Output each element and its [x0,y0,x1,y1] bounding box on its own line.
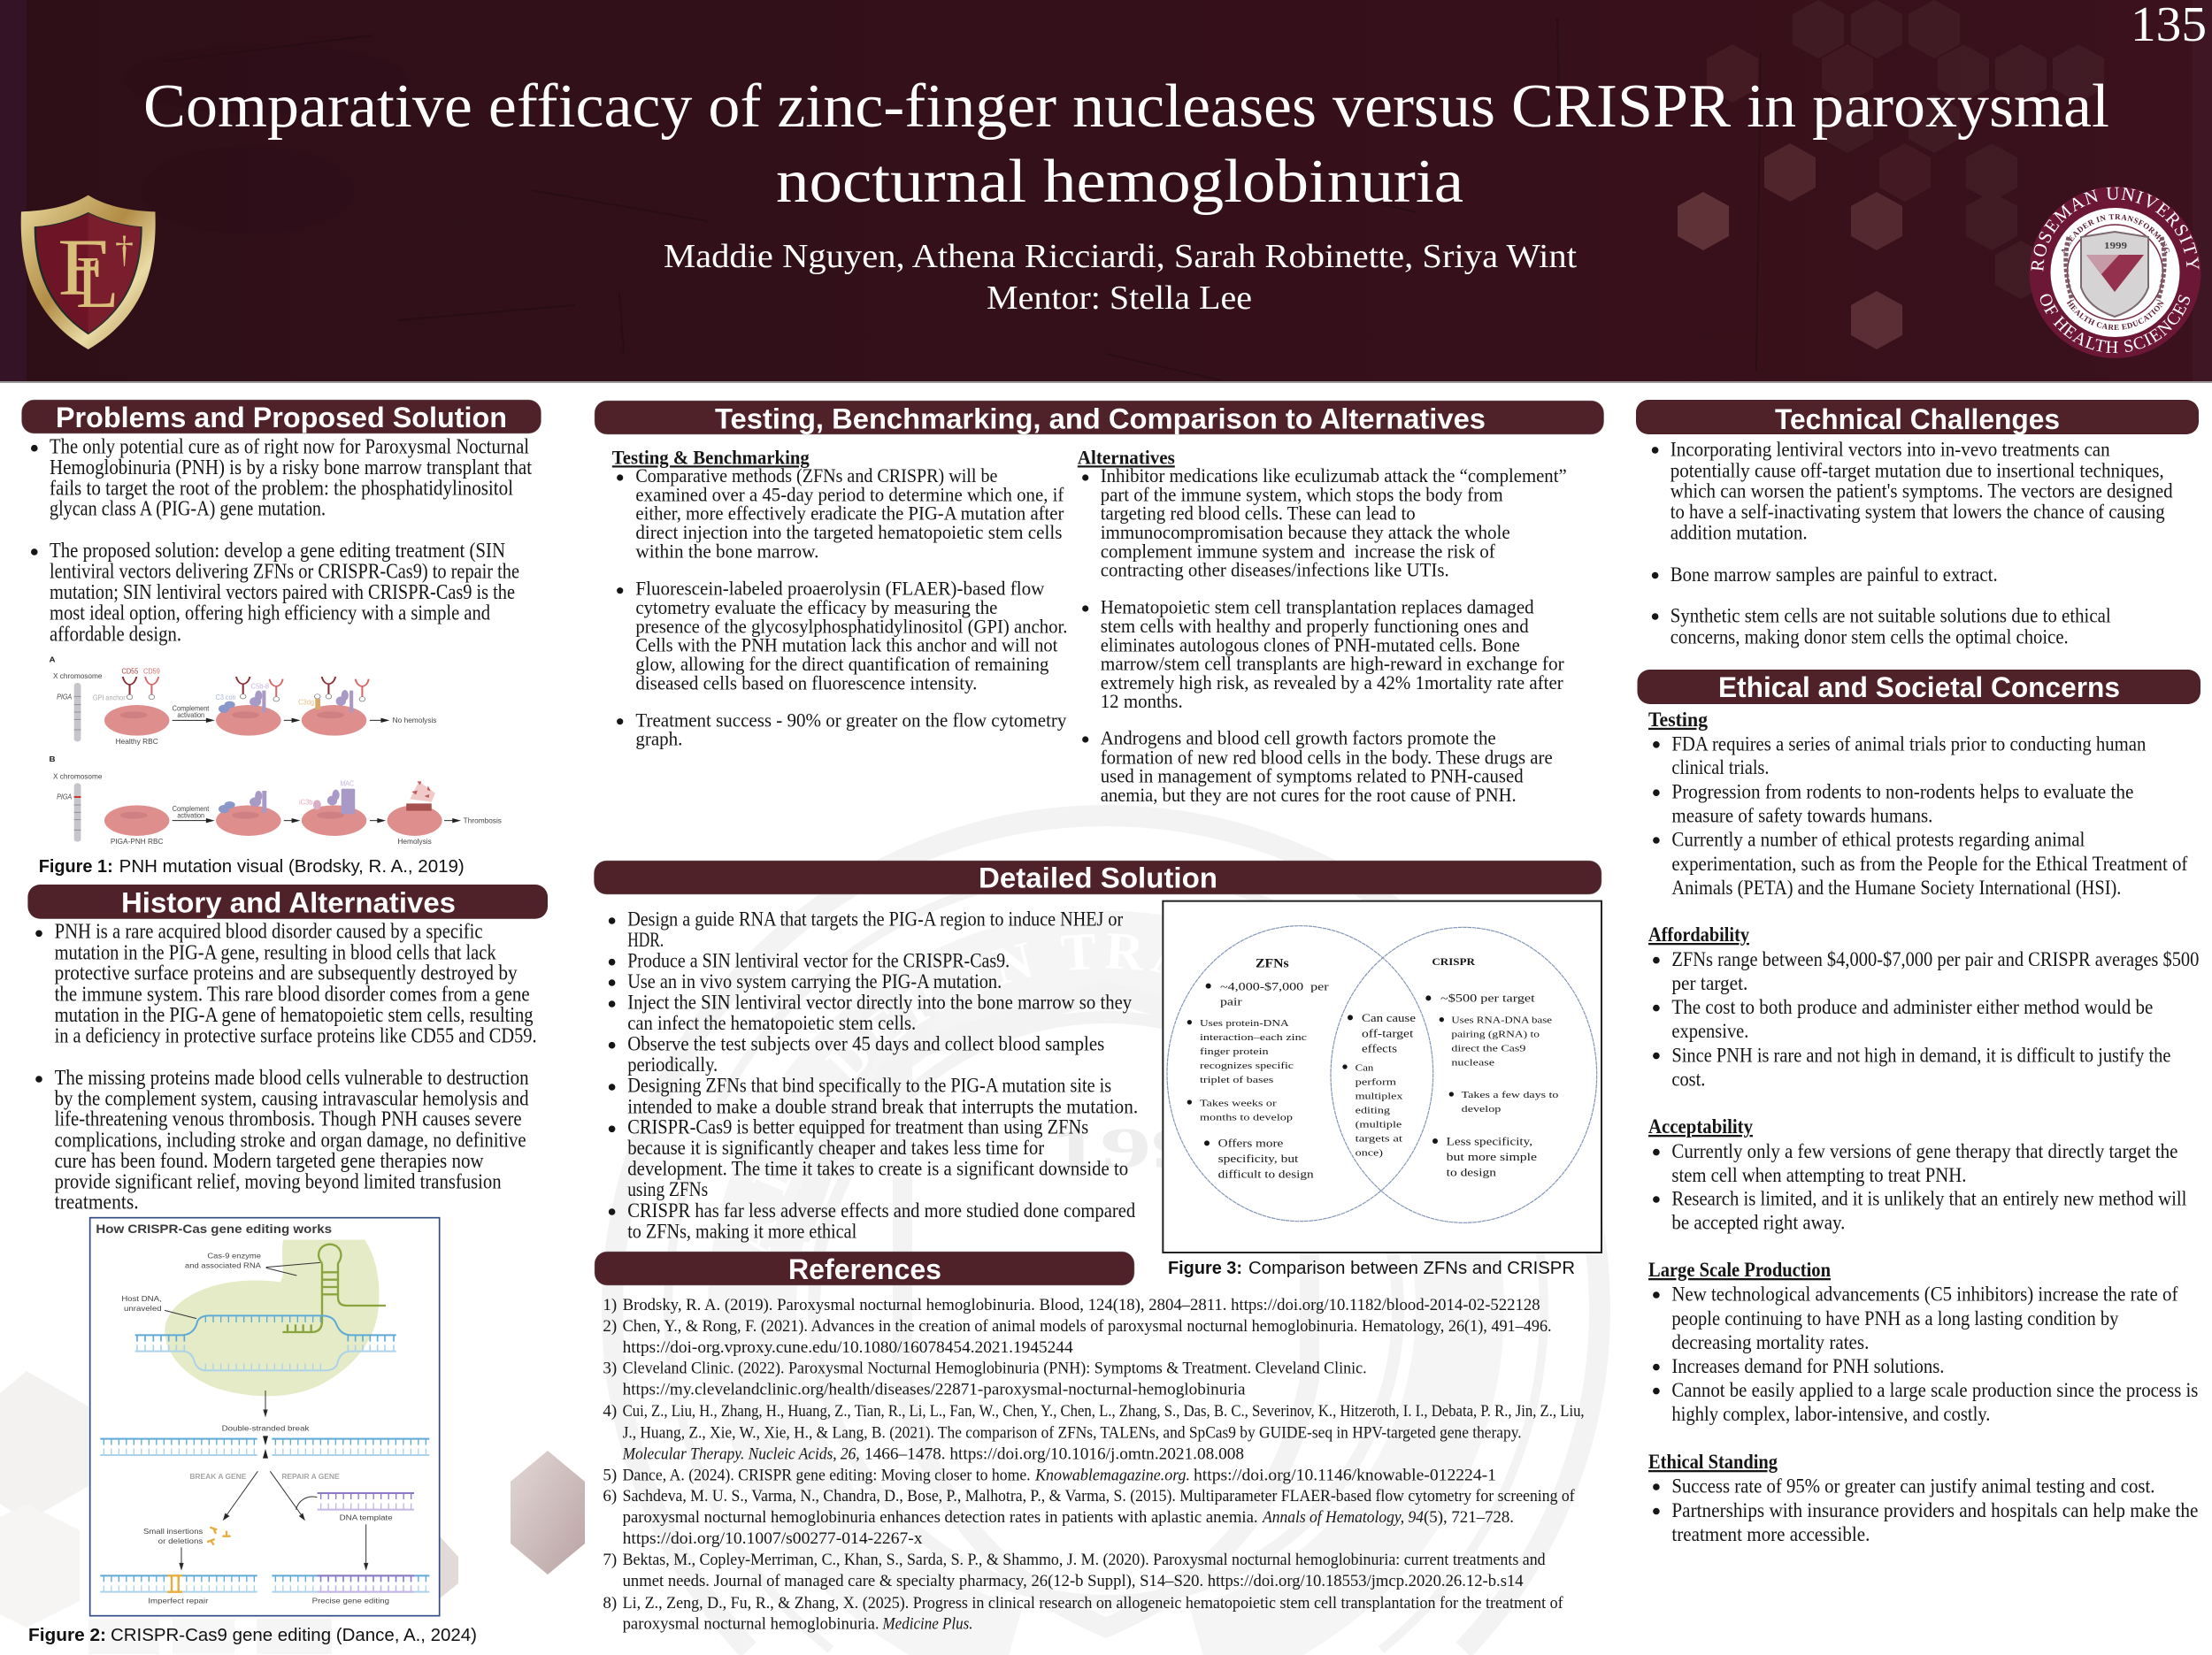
caption: figure 1: PNH mutation visual (Brodsky, R. A., 2019) [119,857,465,877]
text block: solution steps: Use an in vivo system carrying the PIG-A mutation. [627,970,1002,992]
text block: technical challenges: Synthetic stem cells are not suitable solutions due to ethical [1671,604,2111,626]
shared column: perform [1356,1077,1397,1088]
CRISPR column: to design [1447,1166,1496,1178]
panel: references [595,1252,1585,1634]
text block: alternatives: Hematopoietic stem cell transplantation replaces damaged [1101,596,1534,618]
header banner [0,0,2212,383]
text block: testing and benchmarking: presence of the glycosylphosphatidylinositol (GPI) anchor. [635,615,1067,637]
RNA guide [282,1245,386,1332]
reference list: unmet needs. Journal of managed care & specialty pharmacy, 26(12-b Suppl), S14–S20. https://doi.org/10.18553/jmcp.2020.26.12-b.s14 [623,1572,1524,1590]
text block: history: in a deficiency in protective surface proteins like CD55 and CD59. [55,1025,537,1048]
reference list: Bektas, M., Copley-Merriman, C., Khan, S., Sarda, S. P., & Shammo, J. M. (2020). Paroxysmal nocturnal hemoglobinuria: current treatments and [623,1551,1546,1569]
figure 2: CRISPR gene editing diagram [90,1218,440,1616]
heading: technical challenges [1636,400,2199,435]
text block: ethical standing: Ethical Standing [1648,1451,1778,1473]
text block: testing and benchmarking: Treatment success - 90% or greater on the flow cytometry [635,709,1066,731]
ZFNs column: Uses protein-DNA [1200,1018,1289,1029]
text block: problems: most ideal option, offering high efficiency with a simple and [50,601,490,624]
title: Comparative efficacy of zinc-finger nucleases versus CRISPR in paroxysmal [143,73,2109,141]
text block: technical challenges: concerns, making donor stem cells the optimal choice. [1671,625,2069,647]
text block: alternatives: Androgens and blood cell growth factors promote the [1101,727,1496,749]
figure 1: PNH mutation diagram: No hemolysis [393,716,437,724]
caption: figure 1: Figure 1: [39,857,113,877]
reference list: 1) [603,1296,617,1314]
text block: solution steps: to ZFNs, making it more ethical [627,1221,856,1243]
receptors [123,677,369,697]
text block: alternatives: extremely high risk, as revealed by a 42% 1mortality rate after [1101,671,1563,693]
figure 3: ZFNs vs CRISPR venn diagram [1163,901,1601,1253]
ZFNs column: recognizes specific [1200,1061,1294,1071]
heading: references: References [788,1253,941,1285]
heading: ethical and societal concerns: Ethical and Societal Concerns [1718,671,2120,703]
reference list: Cui, Z., Liu, H., Zhang, H., Huang, Z., Tian, R., Li, L., Fan, W., Chen, Y., Chen, L., Zhang, S., Das, B. C., Severinov, K., Hitzeroth, I. I., Debata, P. R., Jin, Z., Liu, [623,1402,1585,1421]
text block: technical challenges: which can worsen the patient's symptoms. The vectors are designed [1671,479,2173,502]
text block: technical challenges: to have a self-inactivating system that lowers the chance of causing [1671,501,2165,523]
text block: solution steps: using ZFNs [627,1178,708,1200]
text block: problems: glycan class A (PIG-A) gene mutation. [50,498,326,521]
header texture [124,18,1761,380]
labels [121,1252,393,1605]
text block: large scale production: Large Scale Production [1648,1259,1831,1281]
figure 1: PNH mutation diagram: B [50,755,56,763]
header hexagons [1678,0,2104,349]
figure 1: PNH mutation diagram: activation [177,811,204,819]
text block: technical challenges: Bone marrow samples are painful to extract. [1671,563,1998,586]
icon: university seal: OF HEALTH SCIENCES [2040,294,2190,354]
labels: Small insertions [143,1527,204,1536]
authors and mentor: Mentor: Stella Lee [987,280,1252,317]
text block: alternatives: used in management of symptoms related to PNH-caused [1101,765,1524,787]
reference list: (5), 721–728. [1424,1508,1514,1527]
CRISPR column: nuclease [1451,1058,1494,1069]
shared column: editing [1356,1106,1391,1116]
text block: solution steps: intended to make a double strand break that interrupts the mutation. [627,1095,1138,1117]
heading: technical challenges: Technical Challenges [1775,403,2060,435]
text block: testing: Animals (PETA) and the Humane Society International (HSI). [1671,877,2121,899]
heading: references [595,1252,1134,1285]
text block: testing and benchmarking: Comparative methods (ZFNs and CRISPR) will be [635,464,997,487]
shared column: multiplex [1356,1091,1403,1101]
reference list: J., Huang, Z., Xie, W., Xie, H., & Lang, B. (2021). The comparison of ZFNs, TALENs, and SpCas9 by GUIDE-seq in HPV-targeted gene therapy. [623,1424,1522,1443]
figure 1: PNH mutation diagram [50,655,502,846]
figure 1: PNH mutation diagram: C3dg [298,699,314,706]
text block: ethical standing [1648,1451,2198,1545]
reference list: Li, Z., Zeng, D., Fu, R., & Zhang, X. (2025). Progress in clinical research on allogeneic hematopoietic stem cell transplantation for the treatment of [623,1594,1563,1613]
reference list: 3) [603,1360,617,1378]
heading: ethical and societal concerns [1637,670,2200,704]
labels: REPAIR A GENE [281,1472,340,1481]
text block: testing and benchmarking: Testing & Benchmarking [612,446,810,468]
shared column: (multiple [1356,1119,1402,1130]
labels: Imperfect repair [148,1596,208,1605]
icon: gold shield logo: † [115,230,134,271]
CRISPR column: direct the Cas9 [1451,1044,1526,1054]
heading: history and alternatives: History and Alternatives [121,887,456,919]
text block: large scale production: highly complex, labor-intensive, and costly. [1671,1403,1990,1425]
arrows [173,718,459,823]
text block: testing and benchmarking: cytometry evaluate the efficacy by measuring the [635,596,997,618]
title: nocturnal hemoglobinuria [776,148,1463,216]
labels: Double-stranded break [222,1423,310,1432]
text block: alternatives: Alternatives [1078,446,1175,468]
labels: Host DNA, [121,1294,162,1303]
figure 1: PNH mutation diagram: CD59 [143,668,160,675]
reference list: Chen, Y., & Rong, F. (2021). Advances in the creation of animal models of paroxysmal nocturnal hemoglobinuria. Hematology, 26(1), 491–496. [623,1317,1552,1336]
text block: large scale production [1648,1259,2198,1425]
text block: problems: Hemoglobinuria (PNH) is by a risky bone marrow transplant that [50,456,532,479]
text block: history: the immune system. This rare blood disorder comes from a gene [55,983,530,1006]
labels: unraveled [124,1304,162,1313]
text block: history: by the complement system, causing intravascular hemolysis and [55,1087,529,1110]
text block: testing: Progression from rodents to non-rodents helps to evaluate the [1671,781,2133,803]
text block: history: complications, including stroke and organ damage, no definitive [55,1129,526,1152]
text block: solution steps: can infect the hematopoietic stem cells. [627,1012,916,1034]
text block: history: The missing proteins made blood cells vulnerable to destruction [55,1067,529,1090]
text block: large scale production: decreasing mortality rates. [1671,1331,1869,1353]
icon: gold shield logo: L [76,241,119,324]
figure 1: PNH mutation diagram: Complement [173,805,210,813]
text block: affordability: Affordability [1648,923,1749,946]
CRISPR column [1425,955,1559,1178]
reference list: https://doi.org/10.1146/knowable-012224-1 [1194,1466,1496,1484]
text block: testing and benchmarking: examined over a 45-day period to determine which one, if [635,483,1064,505]
reference list: 2) [603,1317,617,1336]
reference list: Medicine Plus. [882,1615,973,1634]
labels: DNA template [340,1513,393,1522]
text block: acceptability: be accepted right away. [1671,1212,1845,1234]
reference list: paroxysmal nocturnal hemoglobinuria enhances detection rates in patients with aplastic anemia. [623,1508,1258,1527]
text block: solution steps: Design a guide RNA that targets the PIG-A region to induce NHEJ or [627,908,1123,931]
figure 1: PNH mutation diagram: X chromosome [53,773,103,780]
ZFNs column [1187,956,1330,1180]
caption: figure 2: CRISPR-Cas9 gene editing (Dance, A., 2024) [111,1626,477,1645]
panel: problems and proposed solution [21,400,541,877]
text block: solution steps: periodically. [627,1054,718,1076]
panel: ethical and societal concerns [1637,670,2200,1545]
shared column: once) [1356,1147,1383,1158]
title [143,73,2109,216]
text block: large scale production: Increases demand for PNH solutions. [1671,1355,1944,1377]
text block: testing and benchmarking: graph. [635,728,682,750]
reference list: Dance, A. (2024). CRISPR gene editing: Moving closer to home. [623,1466,1031,1484]
figure 1: PNH mutation diagram: Healthy RBC [116,738,158,746]
text block: testing and benchmarking: Fluorescein-labeled proaerolysin (FLAER)-based flow [635,578,1045,600]
reference list: 4) [603,1402,617,1421]
text block: history: provide significant relief, moving beyond limited transfusion [55,1170,502,1193]
text block: problems: affordable design. [50,623,181,646]
icon: university seal [2030,187,2201,358]
CRISPR column: CRISPR [1432,955,1475,968]
figure 1: PNH mutation diagram: Complement [173,705,210,712]
text block: solution steps: Inject the SIN lentiviral vector directly into the bone marrow so they [627,991,1133,1013]
background hexagons [0,1371,585,1654]
text block: solution steps: development. The time it takes to create is a significant downside to [627,1158,1128,1180]
text block: alternatives: anemia, but they are not cures for the root cause of PNH. [1101,784,1517,806]
orange fragments [207,1528,231,1545]
text block: affordability: The cost to both produce and administer either method would be [1671,996,2153,1018]
figure 1: PNH mutation diagram: C5b-8 [251,682,269,690]
text block: affordability: cost. [1671,1069,1705,1091]
ZFNs column: ~4,000-$7,000 per [1220,980,1330,992]
text block: technical challenges: Incorporating lentiviral vectors into in-vevo treatments can [1671,438,2110,460]
CRISPR column: pairing (gRNA) to [1451,1030,1540,1040]
text block: testing: FDA requires a series of animal trials prior to conducting human [1671,732,2147,755]
arrows and cut marks [165,1262,368,1569]
reference list: Annals of Hematology, 94 [1261,1508,1424,1527]
panel: testing, benchmarking and comparison [595,401,1604,806]
reference list: https://doi-org.vproxy.cune.edu/10.1080/16078454.2021.1945244 [623,1338,1073,1357]
text block: history: mutation in the PIG-A gene, resulting in blood cells that lack [55,941,496,964]
text block: testing and benchmarking: diseased cells based on fluorescence intensity. [635,671,977,693]
text block: alternatives: complement immune system and increase the risk of [1101,540,1495,562]
ZFNs column: ZFNs [1256,956,1289,970]
labels: BREAK A GENE [189,1472,247,1481]
ZFNs column: pair [1220,996,1243,1008]
text block: alternatives: Inhibitor medications like eculizumab attack the “complement” [1101,464,1567,487]
text block: problems: The only potential cure as of right now for Paroxysmal Nocturnal [50,436,529,459]
figure 1: PNH mutation diagram: GPI anchor [93,693,126,701]
text block: acceptability: stem cell when attempting to treat PNH. [1671,1164,1966,1186]
background watermark seal: A LEADER IN TRANSFORMING [739,933,1162,1251]
reference list: Sachdeva, M. U. S., Varma, N., Chandra, D., Bose, P., Malhotra, P., & Varma, S. (2015). Multiparameter FLAER-based flow cytometry for screening of [623,1487,1575,1506]
CRISPR column: Takes a few days to [1462,1090,1559,1100]
text block: testing and benchmarking: Cells with the PNH mutation lack this anchor and will not [635,634,1057,656]
text block: history: cure has been found. Modern targeted gene therapies now [55,1150,484,1173]
text block: history [35,921,537,1214]
text block: technical challenges: addition mutation. [1671,522,1808,543]
reference list [603,1296,1585,1634]
text block: solution steps: Designing ZFNs that bind specifically to the PIG-A mutation site is [627,1075,1111,1097]
reference list: https://doi.org/10.1007/s00277-014-2267-x [623,1529,923,1548]
ladders [100,1439,429,1592]
panel: technical challenges [1636,400,2199,647]
red blood cells [104,705,442,836]
heading: detailed solution [594,861,1601,894]
heading: history and alternatives [27,885,548,919]
labels: and associated RNA [185,1261,261,1270]
text block: testing [1648,709,2188,899]
caption: figure 3: Comparison between ZFNs and CRISPR [1248,1259,1575,1278]
text block: testing and benchmarking: direct injection into the targeted hematopoietic stem cells [635,521,1062,543]
text block: alternatives [1078,446,1567,806]
labels: Cas-9 enzyme [207,1252,261,1260]
text block: problems: fails to target the root of the problem: the phosphatidylinositol [50,477,513,500]
text block: testing: clinical trials. [1671,756,1769,778]
icon: gold shield logo: F [58,222,109,312]
ZFNs column: triplet of bases [1200,1075,1273,1085]
shared column: targets at [1356,1133,1402,1144]
text block: alternatives: formation of new red blood cells in the body. These drugs are [1101,746,1553,768]
figure 1: PNH mutation diagram: Thrombosis [464,816,502,824]
ZFNs column: months to develop [1200,1113,1294,1123]
text block: problems [31,436,532,646]
reference list: Molecular Therapy. Nucleic Acids, 26, [622,1445,860,1464]
text block: ethical standing: treatment more accessible. [1671,1523,1870,1545]
authors and mentor: Maddie Nguyen, Athena Ricciardi, Sarah Robinette, Sriya Wint [664,238,1577,275]
shared column: effects [1362,1043,1397,1055]
text block: alternatives: 12 months. [1101,690,1183,712]
ZFNs column: specificity, but [1218,1153,1299,1165]
authors and mentor [664,238,1577,317]
text block: testing: Currently a number of ethical protests regarding animal [1671,829,2085,851]
reference list: Cleveland Clinic. (2022). Paroxysmal Nocturnal Hemoglobinuria (PNH): Symptoms & Treatment. Cleveland Clinic. [623,1360,1367,1378]
reference list: Brodsky, R. A. (2019). Paroxysmal nocturnal hemoglobinuria. Blood, 124(18), 2804–2811. https://doi.org/10.1182/blood-2014-02-522128 [623,1296,1540,1314]
CRISPR column: ~$500 per target [1440,992,1535,1005]
reference list: paroxysmal nocturnal hemoglobinuria. [623,1615,879,1634]
figure 1: PNH mutation diagram: PIGA [57,693,72,701]
text block: affordability: expensive. [1671,1020,1748,1042]
text block: solution steps [609,908,1138,1243]
text block: technical challenges [1652,438,2173,647]
heading: detailed solution: Detailed Solution [979,862,1217,893]
text block: solution steps: Observe the test subjects over 45 days and collect blood samples [627,1032,1104,1054]
ZFNs column: Takes weeks or [1200,1098,1277,1108]
text block: history: life-threatening venous thrombosis. Though PNH causes severe [55,1108,522,1131]
CRISPR column: Less specificity, [1447,1136,1532,1148]
text block: testing: measure of safety towards humans. [1671,805,1932,826]
text block: alternatives: eliminates autologous clones of PNH-mutated cells. Bone [1101,633,1520,655]
text block: testing and benchmarking: glow, allowing for the direct quantification of remaining [635,653,1048,675]
text block: testing and benchmarking [612,446,1067,750]
shared column: Can cause [1362,1012,1417,1024]
figure 1: PNH mutation diagram: A [50,655,56,663]
shared column: Can [1356,1063,1374,1074]
green enzyme blob [165,1240,380,1396]
reference list: 1466–1478. https://doi.org/10.1016/j.omtn.2021.08.008 [864,1445,1244,1464]
icon: university seal: ROSEMAN UNIVERSITY [2032,188,2200,272]
ZFNs column: finger protein [1200,1046,1269,1057]
text block: testing: Testing [1648,709,1708,731]
text block: solution steps: HDR. [627,929,664,951]
caption: figure 3: Figure 3: [1168,1259,1242,1278]
panel: detailed solution [594,861,1601,1278]
text block: affordability: per target. [1671,972,1747,994]
text block: technical challenges: potentially cause off-target mutation due to insertional techniques, [1671,460,2164,481]
ZFNs column: interaction–each zinc [1200,1032,1307,1043]
reference list: https://my.clevelandclinic.org/health/diseases/22871-paroxysmal-nocturnal-hemoglobinuria [623,1381,1246,1399]
shared column: off-target [1362,1027,1414,1039]
reference list: 7) [603,1551,617,1569]
reference list: 5) [603,1466,617,1484]
text block: history: protective surface proteins and are subsequently destroyed by [55,962,518,985]
reference list: 6) [603,1487,617,1506]
heading: problems and proposed solution: Problems and Proposed Solution [56,402,507,433]
ZFNs column: difficult to design [1218,1168,1314,1180]
figure 1: PNH mutation diagram: activation [177,711,204,719]
figure 1: PNH mutation diagram: PIGA-PNH RBC [111,838,164,846]
chromosomes [74,683,81,842]
text block: testing and benchmarking: either, more effectively eradicate the PIG-A mutation after [635,502,1064,525]
ZFNs column: Offers more [1218,1138,1284,1150]
text block: solution steps: because it is significantly cheaper and takes less time for [627,1137,1045,1159]
CRISPR column: develop [1462,1104,1502,1115]
reference list: Knowablemagazine.org. [1034,1466,1190,1484]
text block: testing and benchmarking: within the bone marrow. [635,540,818,562]
text block: acceptability: Acceptability [1648,1115,1753,1138]
icon: university seal: HEALTH CARE EDUCATION [2067,299,2164,330]
figure 2: CRISPR gene editing diagram: How CRISPR-Cas gene editing works [96,1222,332,1236]
text block: alternatives: marrow/stem cell transplants are high-reward in exchange for [1101,653,1564,675]
text block: alternatives: immunocompromisation because they attack the whole [1101,521,1510,543]
icon: university seal: A LEADER IN TRANSFORMING [2062,214,2170,253]
text block: solution steps: Produce a SIN lentiviral vector for the CRISPR-Cas9. [627,949,1010,971]
heading: testing, benchmarking and comparison: Testing, Benchmarking, and Comparison to Alternatives [715,402,1486,434]
icon: university seal: 1999 [2104,241,2128,251]
text block: alternatives: part of the immune system, which stops the body from [1101,483,1503,505]
complement proteins [219,701,235,813]
text block: large scale production: people continuing to have PNH as a long lasting condition by [1671,1307,2119,1329]
CRISPR column: Uses RNA-DNA base [1451,1015,1552,1026]
panel: history and alternatives [27,885,548,1645]
background watermark seal: 1999 [1049,1116,1253,1181]
background watermark seal [602,805,1610,1655]
text block: ethical standing: Success rate of 95% or greater can justify animal testing and cost. [1671,1475,2154,1498]
figure 1: PNH mutation diagram: MAC [340,779,354,787]
text block: problems: mutation; SIN lentiviral vectors paired with CRISPR-Cas9 is the [50,581,515,604]
text block: solution steps: CRISPR has far less adverse effects and more studied done compared [627,1199,1136,1222]
text block: problems: lentiviral vectors delivering ZFNs or CRISPR-Cas9) to repair the [50,561,519,584]
text block: history: mutation in the PIG-A gene of hematopoietic stem cells, resulting [55,1004,534,1027]
figure 1: PNH mutation diagram: PIGA [57,793,72,801]
text block: alternatives: targeting red blood cells. These can lead to [1101,502,1416,525]
labels: Precise gene editing [312,1596,389,1605]
figure 1: PNH mutation diagram: C3 con [216,693,236,701]
text block: affordability [1648,923,2199,1091]
caption: figure 2: Figure 2: [28,1626,106,1645]
text block: alternatives: stem cells with healthy and properly functioning ones and [1101,615,1529,637]
text block: history: treatments. [55,1191,139,1214]
labels: or deletions [158,1536,204,1545]
text block: history: PNH is a rare acquired blood disorder caused by a specific [55,921,483,944]
text block: problems: The proposed solution: develop a gene editing treatment (SIN [50,540,505,563]
icon: gold shield logo [21,195,156,349]
DNA unraveled [135,1315,396,1370]
shared column [1342,1012,1417,1158]
figure 1: PNH mutation diagram: X chromosome [53,672,103,680]
figure 1: PNH mutation diagram: Hemolysis [397,838,432,846]
figure 1: PNH mutation diagram: iC3b [299,799,312,806]
text block: solution steps: CRISPR-Cas9 is better equipped for treatment than using ZFNs [627,1116,1088,1138]
text block: alternatives: contracting other diseases/infections like UTIs. [1101,558,1449,580]
figure 1: PNH mutation diagram: CD55 [122,668,138,675]
reference list: 8) [603,1594,617,1613]
text block: acceptability [1648,1115,2186,1234]
CRISPR column: but more simple [1447,1151,1538,1163]
